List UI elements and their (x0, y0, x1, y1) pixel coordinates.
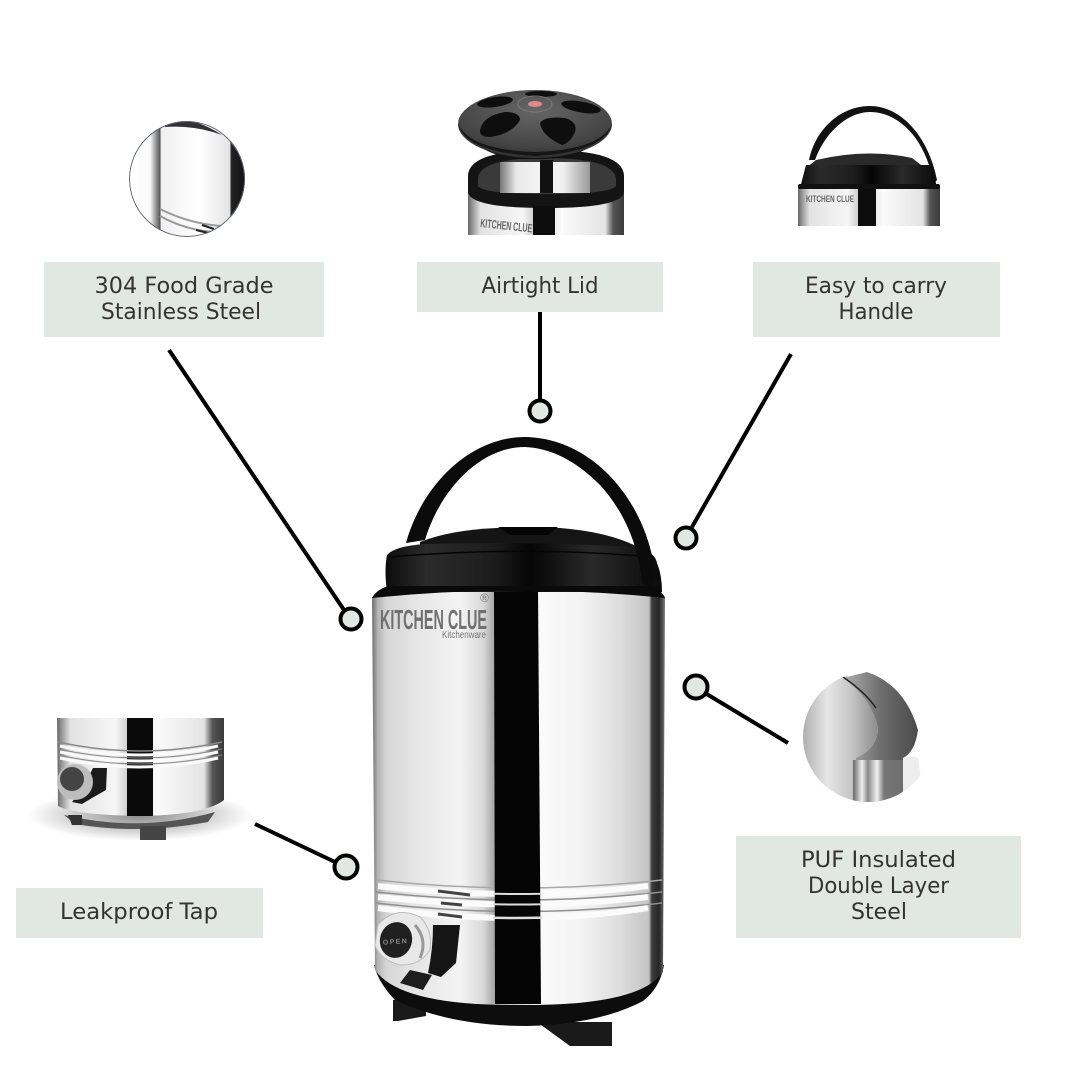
label: Easy to carry Handle (753, 262, 1000, 337)
main product: insulated water dispenser (372, 437, 665, 1046)
thumbnail: stainless steel close-up (129, 120, 246, 237)
thumbnail: handle: KITCHEN CLUE (806, 194, 854, 204)
connector: insulation (684, 676, 788, 743)
handle (406, 437, 655, 586)
thumbnail: insulation cross-section (800, 672, 925, 805)
label: PUF Insulated Double Layer Steel: PUF Insulated (801, 848, 956, 873)
label: PUF Insulated Double Layer Steel (736, 836, 1021, 938)
label: Airtight Lid: Airtight Lid (482, 274, 598, 299)
centre black stripe (494, 590, 541, 1004)
connector: tap (255, 824, 358, 878)
thumbnail: handle (798, 106, 940, 226)
label: 304 Food Grade Stainless Steel: 304 Food Grade (94, 274, 274, 299)
lid rim (386, 543, 662, 592)
label: PUF Insulated Double Layer Steel: Double Layer (808, 874, 950, 899)
label: Easy to carry Handle: Easy to carry (805, 274, 947, 299)
open lid collar: KITCHEN CLUE (480, 216, 533, 235)
label: Easy to carry Handle: Handle (838, 300, 914, 325)
label: Leakproof Tap: Leakproof Tap (60, 900, 218, 925)
feet (393, 1000, 612, 1046)
brand wordmark: KITCHEN CLUE (380, 604, 487, 635)
brand wordmark (380, 591, 489, 641)
brand wordmark: Kitchenware (442, 630, 486, 641)
lid vent (498, 527, 558, 535)
label: 304 Food Grade Stainless Steel: Stainless Steel (101, 300, 261, 325)
lid flange (372, 586, 665, 598)
connector: stainless steel (169, 350, 362, 630)
thumbnail: leakproof tap (28, 718, 252, 841)
lid dome (420, 528, 640, 560)
base (374, 965, 664, 1026)
open lid collar (468, 150, 624, 235)
thumbnail: airtight lid (458, 90, 624, 235)
steel body (372, 591, 665, 1005)
label: Airtight Lid (417, 262, 663, 312)
connector: airtight lid (530, 312, 550, 422)
tap (375, 912, 460, 990)
label: Leakproof Tap (16, 888, 263, 938)
rib highlights across stripe (493, 892, 542, 920)
label: 304 Food Grade Stainless Steel (44, 262, 324, 337)
brand wordmark: ® (480, 591, 489, 605)
tap: OPEN (383, 938, 407, 947)
lid disc (458, 90, 612, 159)
ribs (376, 880, 662, 918)
connector: handle (676, 354, 791, 548)
label: PUF Insulated Double Layer Steel: Steel (851, 900, 907, 925)
